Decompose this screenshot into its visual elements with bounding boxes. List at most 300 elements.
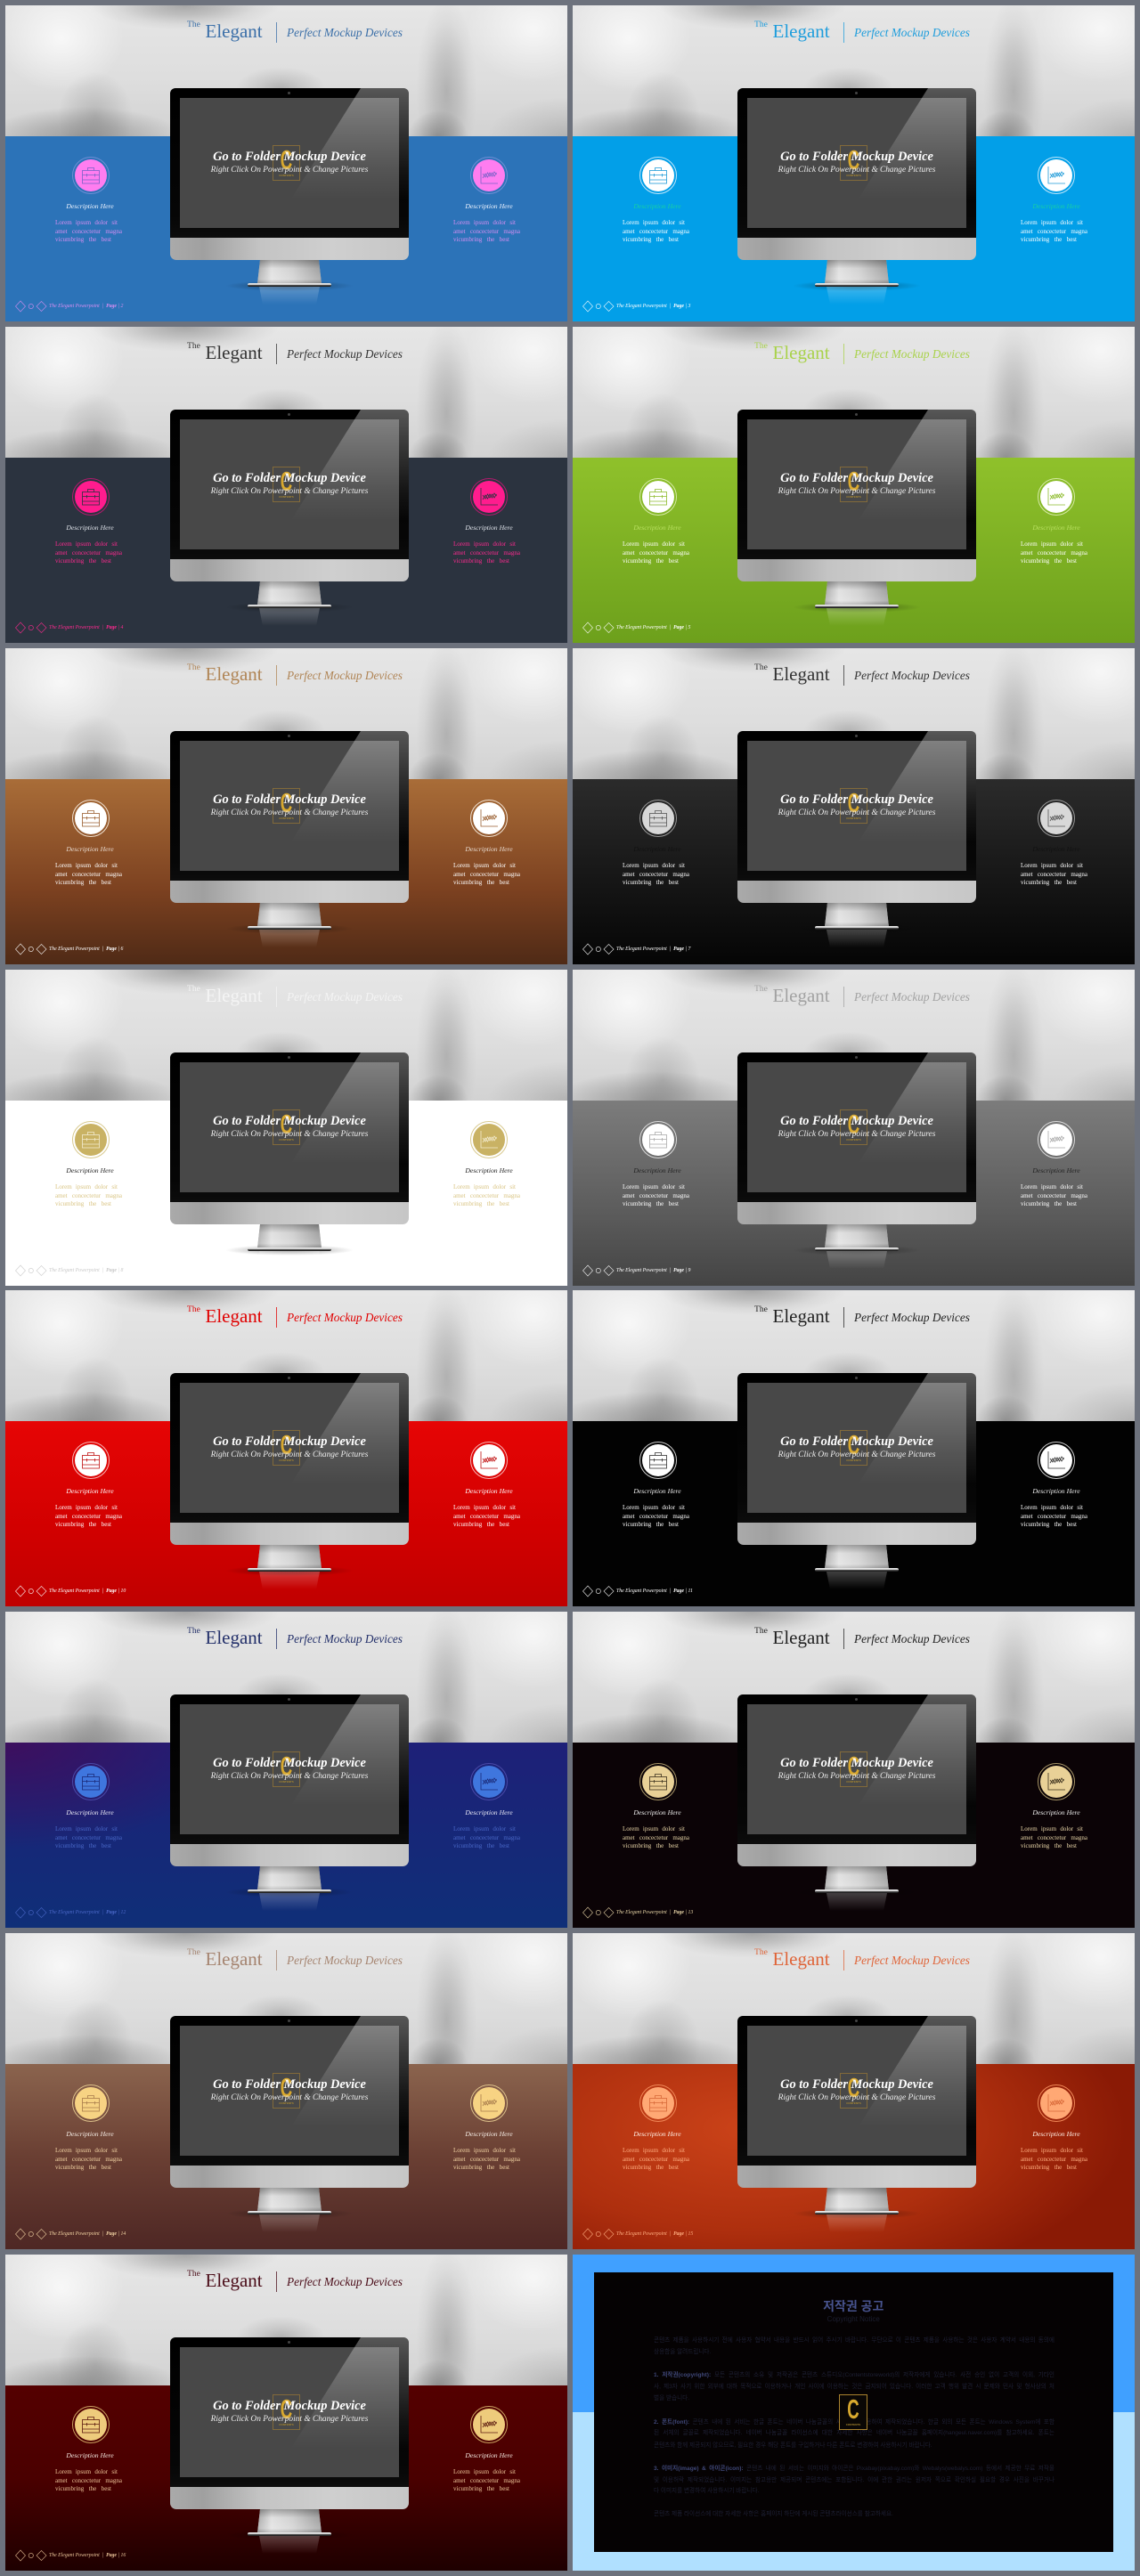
monitor mockup: CONTENTS (279, 2423, 294, 2426)
left description text: Lorem ipsum dolor sit (623, 1825, 685, 1832)
title: Perfect Mockup Devices (854, 347, 970, 361)
monitor mockup: Right Click On Powerpoint & Change Pictures (778, 166, 935, 175)
background: blurred grey wall (5, 1612, 567, 1743)
right description text: vicumbring the best (1021, 557, 1077, 565)
title: The (754, 1304, 768, 1314)
footer text: The Elegant Powerpoint | Page | 14 (49, 2231, 126, 2237)
right description heading: Description Here (465, 1487, 513, 1495)
lower colour panel (5, 2064, 567, 2249)
left description text: amet concectetur magna (623, 549, 689, 557)
right description text: amet concectetur magna (453, 2156, 520, 2163)
title: Elegant (205, 1305, 263, 1327)
monitor mockup: C (281, 2073, 292, 2103)
footer text: The Elegant Powerpoint | Page | 4 (49, 625, 123, 630)
monitor mockup: Right Click On Powerpoint & Change Pictures (778, 2093, 935, 2102)
title: Perfect Mockup Devices (287, 990, 403, 1004)
title: Elegant (773, 985, 830, 1006)
left description text: Lorem ipsum dolor sit (55, 1825, 118, 1832)
left description text (623, 1504, 694, 1532)
left description heading: Description Here (66, 2130, 114, 2138)
left description text: Lorem ipsum dolor sit (55, 540, 118, 548)
clause 1 line 1: 1. 저작권(copyright): 모든 콘텐츠의 소유 및 저작권은 콘텐츠 스튜디오(Contentstoreworld)의 저작자에게 있습니다. 사전 승인 없이 고객의 이외, 기타인 (654, 2372, 1054, 2378)
footer text: The Elegant Powerpoint | Page | 3 (616, 304, 690, 309)
title: The (187, 1304, 200, 1314)
right description heading: Description Here (465, 845, 513, 853)
footer icons (582, 2228, 615, 2240)
right description text: vicumbring the best (453, 1200, 509, 1207)
gold logo (839, 2394, 867, 2430)
title: Perfect Mockup Devices (287, 2275, 403, 2288)
background: blurred grey wall (573, 1290, 1135, 1422)
title: The (754, 662, 768, 672)
title: Perfect Mockup Devices (287, 1632, 403, 1646)
title: Perfect Mockup Devices (854, 1632, 970, 1646)
right description text: vicumbring the best (1021, 2164, 1077, 2171)
background: blurred grey wall (573, 1612, 1135, 1743)
right description text: Lorem ipsum dolor sit (453, 862, 516, 869)
right description text (453, 1825, 525, 1854)
right description heading: Description Here (465, 1166, 513, 1174)
footer icons (582, 1264, 615, 1277)
left description text: vicumbring the best (55, 1842, 111, 1849)
background: blurred grey wall (5, 970, 567, 1101)
title (751, 1624, 982, 1653)
left description text: amet concectetur magna (623, 228, 689, 235)
closing line: 콘텐츠 제품 라이선스에 대한 자세한 사항은 홈페이지 하단에 게시된 콘텐츠라이선스를 참고하세요. (654, 2511, 893, 2517)
intro line 1: 콘텐츠 제품을 사용하시기 전에 사용자 협약서 내용을 반드시 읽어 주시기 바랍니다. 무단으로 이 콘텐츠 제품을 사용하는 것은 사용자 계약서 내용의 동의에 (654, 2337, 1054, 2344)
clause 2 line 1: 2. 폰트(font): 콘텐츠 내에 된 서비는 한글 폰트는 네이버 나눔글꼴의 서비스를 이용하여 제작되었습니다. 한글 외의 모든 폰트는 Windows System에 포함 (654, 2419, 1054, 2426)
left description text: Lorem ipsum dolor sit (623, 540, 685, 548)
monitor mockup: Go to Folder Mockup Device (780, 1434, 933, 1449)
footer icons (582, 622, 615, 634)
right description text (453, 862, 520, 886)
left description heading: Description Here (66, 2451, 114, 2459)
footer icons (582, 1906, 615, 1919)
right description text (453, 1183, 520, 1207)
lower colour panel (5, 2385, 567, 2571)
right description text: Lorem ipsum dolor sit (1021, 1183, 1083, 1190)
left description heading: Description Here (633, 524, 681, 532)
footer icons (582, 1585, 615, 1597)
slide: grey, page 9 (573, 970, 1135, 1286)
footer text: The Elegant Powerpoint | Page | 15 (616, 2231, 693, 2237)
monitor mockup: Go to Folder Mockup Device (213, 2077, 366, 2092)
right description text: vicumbring the best (453, 1521, 509, 1528)
slide: black, page 11 (573, 1290, 1135, 1606)
monitor mockup: C (281, 788, 292, 818)
slide: sky blue, page 3 (573, 5, 1135, 321)
title: The (754, 1947, 768, 1957)
footer icons (15, 1264, 46, 1277)
left description heading: Description Here (633, 845, 681, 853)
right description text: amet concectetur magna (1021, 2156, 1087, 2163)
background: blurred grey wall (573, 5, 1135, 137)
title (187, 341, 403, 364)
slide: indigo night, page 12 (5, 1612, 567, 1928)
title: The (187, 662, 200, 672)
footer text: The Elegant Powerpoint | Page | 6 (49, 947, 123, 952)
title: Perfect Mockup Devices (854, 990, 970, 1004)
monitor mockup: Right Click On Powerpoint & Change Pictures (211, 487, 368, 496)
right description text: vicumbring the best (1021, 1200, 1077, 1207)
footer icons (15, 301, 46, 312)
gold logo: CONTENTS (846, 2423, 860, 2426)
right description text: vicumbring the best (453, 879, 509, 886)
left description text: amet concectetur magna (623, 1192, 689, 1199)
monitor mockup (170, 410, 409, 623)
left description text: vicumbring the best (55, 236, 111, 243)
title: Perfect Mockup Devices (854, 669, 970, 682)
clause 1 line 2: 사, 제3자 사기 위한 외부에 대하 목적으로 이용하거나 개인 사이에 이용하는 것은 금지되어 있습니다. 이러한 고객 행위 발견 시 문제와 민사 및 형사상의 처 (654, 2384, 1054, 2390)
title: Perfect Mockup Devices (287, 1954, 403, 1967)
footer icons (15, 2228, 47, 2240)
right description text: vicumbring the best (453, 557, 509, 565)
lower colour panel (573, 779, 1135, 964)
footer icons (15, 944, 46, 955)
monitor mockup: Right Click On Powerpoint & Change Pictures (211, 1451, 368, 1459)
footer text: The Elegant Powerpoint | Page | 11 (616, 1589, 693, 1594)
right description text: amet concectetur magna (1021, 871, 1087, 878)
monitor mockup: Go to Folder Mockup Device (780, 471, 933, 485)
monitor mockup: CONTENTS (846, 817, 861, 820)
background: blurred grey wall (5, 1933, 567, 2065)
slide: charcoal, page 7 (573, 648, 1135, 964)
footer text: The Elegant Powerpoint | Page | 7 (616, 947, 690, 952)
left description text (623, 540, 689, 565)
title (751, 1303, 982, 1331)
slide: near-black and tan, page 13 (573, 1612, 1135, 1928)
left description text: amet concectetur magna (623, 1834, 689, 1841)
clause 2 line 2: 된 서체의 글꼴로 제작되었습니다. 네이버 나눔글꼴 라이선스에 대한 자세한 사항은 네이버 나눔글꼴 홈페이지(hangeul.naver.com)를 참고하세요. 폰트는 (654, 2430, 1054, 2436)
title: Elegant (205, 342, 263, 363)
left description heading: Description Here (633, 2130, 681, 2138)
lower colour panel (5, 1421, 567, 1606)
icon: briefcase (639, 478, 677, 516)
left description heading: Description Here (633, 1166, 681, 1174)
monitor mockup (170, 731, 409, 945)
right description text: Lorem ipsum dolor sit (1021, 540, 1083, 548)
left description text: vicumbring the best (623, 557, 679, 565)
left description text: vicumbring the best (623, 2164, 679, 2171)
icon: briefcase (639, 1442, 677, 1479)
icon: chart (470, 1121, 508, 1158)
slide: copper brown, page 6 (5, 648, 567, 964)
title: Perfect Mockup Devices (287, 347, 403, 361)
right description heading: Description Here (1032, 524, 1080, 532)
left description text: amet concectetur magna (623, 871, 689, 878)
monitor mockup: CONTENTS (846, 495, 861, 499)
left description text (623, 862, 689, 886)
clause 3 line 3: 다 이미지를 변경하여 사용하시기 바랍니다. (654, 2488, 759, 2494)
left description text: Lorem ipsum dolor sit (55, 862, 118, 869)
monitor mockup: C (281, 145, 292, 175)
right description text: Lorem ipsum dolor sit (1021, 1504, 1083, 1511)
right description text: Lorem ipsum dolor sit (453, 1183, 516, 1190)
background: blurred grey wall (5, 1290, 567, 1422)
monitor mockup: Right Click On Powerpoint & Change Pictures (211, 2415, 368, 2424)
monitor mockup: Right Click On Powerpoint & Change Pictures (211, 1130, 368, 1139)
monitor mockup: Go to Folder Mockup Device (213, 1756, 366, 1770)
monitor mockup (737, 2016, 976, 2230)
title: The (754, 20, 768, 29)
right description text: vicumbring the best (1021, 1842, 1077, 1849)
title: Perfect Mockup Devices (287, 26, 403, 39)
lower colour panel (5, 779, 567, 964)
icon: chart (1038, 478, 1075, 516)
left description text: Lorem ipsum dolor sit (55, 2147, 118, 2154)
left description text: vicumbring the best (55, 2164, 111, 2171)
slide: copyright notice (573, 2255, 1135, 2571)
monitor mockup: Right Click On Powerpoint & Change Pictures (211, 166, 368, 175)
title (754, 662, 970, 686)
left description text: Lorem ipsum dolor sit (623, 1504, 685, 1511)
left description text: amet concectetur magna (55, 1192, 122, 1199)
monitor mockup: Go to Folder Mockup Device (213, 1114, 366, 1128)
left description text: vicumbring the best (623, 236, 679, 243)
monitor mockup: Right Click On Powerpoint & Change Pictures (778, 487, 935, 496)
monitor mockup (170, 88, 409, 301)
left description text (623, 1825, 694, 1854)
left description text: vicumbring the best (623, 1200, 679, 1207)
left description text (55, 2147, 126, 2175)
right description heading: Description Here (1032, 845, 1080, 853)
title: Elegant (773, 663, 830, 685)
right description text (453, 540, 520, 565)
right description text: vicumbring the best (453, 2164, 509, 2171)
left description text: amet concectetur magna (623, 2156, 689, 2163)
monitor mockup: Go to Folder Mockup Device (780, 792, 933, 807)
right description heading: Description Here (465, 202, 513, 210)
right description text: Lorem ipsum dolor sit (453, 2468, 516, 2475)
monitor mockup: Right Click On Powerpoint & Change Pictures (211, 809, 368, 817)
icon: chart (1038, 157, 1075, 194)
right description heading: Description Here (1032, 1166, 1080, 1174)
right description heading: Description Here (1032, 1808, 1080, 1816)
title (754, 20, 970, 43)
monitor mockup: C (281, 2394, 292, 2425)
right description text (1021, 219, 1087, 243)
notice subtitle: Copyright Notice (827, 2315, 880, 2323)
monitor mockup: CONTENTS (279, 1780, 294, 1784)
title (751, 1946, 982, 1974)
left description heading: Description Here (66, 1166, 114, 1174)
right description text (1021, 2147, 1092, 2175)
left description text (55, 1183, 122, 1207)
footer text: The Elegant Powerpoint | Page | 12 (49, 1910, 126, 1915)
monitor mockup: C (281, 1109, 292, 1140)
right description text: vicumbring the best (453, 2485, 509, 2492)
monitor mockup: Go to Folder Mockup Device (213, 1434, 366, 1449)
left description text: vicumbring the best (623, 1521, 679, 1528)
left description text: amet concectetur magna (623, 1513, 689, 1520)
monitor mockup: C (281, 1430, 292, 1460)
monitor mockup: CONTENTS (279, 1459, 294, 1462)
right description heading: Description Here (465, 2451, 513, 2459)
left description text (623, 2147, 694, 2175)
icon: chart (1038, 2084, 1075, 2122)
monitor mockup: CONTENTS (279, 817, 294, 820)
monitor mockup: Right Click On Powerpoint & Change Pictures (211, 2093, 368, 2102)
lower colour panel (5, 136, 567, 321)
right description text: vicumbring the best (1021, 236, 1077, 243)
title (183, 1624, 415, 1653)
lower colour panel (573, 1421, 1135, 1606)
lower colour panel (5, 458, 567, 643)
right description text: amet concectetur magna (453, 1834, 520, 1841)
background: blurred grey wall (5, 5, 567, 137)
monitor mockup: C (281, 467, 292, 497)
slide: green, page 5 (573, 327, 1135, 643)
title (187, 662, 403, 686)
icon: briefcase (639, 157, 677, 194)
monitor mockup: Go to Folder Mockup Device (780, 2077, 933, 2092)
right description text (1021, 1504, 1092, 1532)
icon: briefcase (72, 478, 110, 516)
clause 3 line 1: 3. 이미지(image) & 아이콘(icon): 콘텐츠 내에 된 서비는 이미지와 아이콘은 Pixabay(pixabay.com)와 Webalys(webalys.com) 등에서 제공한 무료 저작물 (654, 2466, 1054, 2472)
right description text: amet concectetur magna (453, 2477, 520, 2484)
monitor mockup: Right Click On Powerpoint & Change Pictures (778, 1772, 935, 1781)
right description text: amet concectetur magna (453, 871, 520, 878)
monitor mockup (170, 1694, 409, 1908)
left description text (55, 540, 122, 565)
left description heading: Description Here (633, 1808, 681, 1816)
right description text: vicumbring the best (1021, 1521, 1077, 1528)
background: blurred grey wall (573, 1933, 1135, 2065)
lower colour panel (5, 1743, 567, 1928)
left description text: vicumbring the best (623, 879, 679, 886)
icon: chart (470, 1442, 508, 1479)
left description text: Lorem ipsum dolor sit (623, 862, 685, 869)
title: Elegant (205, 1948, 263, 1970)
left description text: Lorem ipsum dolor sit (55, 219, 118, 226)
monitor mockup: Go to Folder Mockup Device (213, 471, 366, 485)
left description text: amet concectetur magna (55, 228, 122, 235)
lower colour panel (573, 458, 1135, 643)
right description text (1021, 862, 1087, 886)
title: Perfect Mockup Devices (854, 1954, 970, 1967)
monitor mockup: C (848, 1751, 859, 1782)
left description heading: Description Here (66, 524, 114, 532)
left description text: vicumbring the best (55, 557, 111, 565)
slide: maroon, page 16 (5, 2255, 567, 2571)
title: Elegant (205, 985, 263, 1006)
monitor mockup (170, 1373, 409, 1587)
slide: burnt orange, page 15 (573, 1933, 1135, 2249)
left description text: amet concectetur magna (55, 2156, 122, 2163)
right description text (1021, 1183, 1087, 1207)
monitor mockup: CONTENTS (846, 1138, 861, 1142)
left description heading: Description Here (66, 1808, 114, 1816)
right description heading: Description Here (1032, 1487, 1080, 1495)
title: Perfect Mockup Devices (854, 1311, 970, 1324)
left description text: amet concectetur magna (55, 2477, 122, 2484)
monitor mockup: C (848, 788, 859, 818)
left description heading: Description Here (66, 1487, 114, 1495)
title: The (187, 1626, 200, 1636)
right description text: amet concectetur magna (1021, 1834, 1087, 1841)
background: blurred grey wall (5, 2255, 567, 2386)
right description text: vicumbring the best (1021, 879, 1077, 886)
right description text (453, 219, 520, 243)
title: The (187, 1947, 200, 1957)
right description text: Lorem ipsum dolor sit (453, 1504, 516, 1511)
title: Perfect Mockup Devices (854, 26, 970, 39)
background: blurred grey wall (573, 648, 1135, 780)
title: Elegant (773, 1305, 830, 1327)
monitor mockup: C (281, 1751, 292, 1782)
monitor mockup: Right Click On Powerpoint & Change Pictures (778, 1130, 935, 1139)
right description text: Lorem ipsum dolor sit (453, 2147, 516, 2154)
right description text: Lorem ipsum dolor sit (453, 540, 516, 548)
footer icons (15, 1906, 47, 1919)
monitor mockup: C (848, 1109, 859, 1140)
right description text: amet concectetur magna (1021, 549, 1087, 557)
icon: chart (1038, 1121, 1075, 1158)
left description text: vicumbring the best (55, 2485, 111, 2492)
footer icons (15, 1585, 47, 1597)
background: blurred grey wall (573, 327, 1135, 459)
title: Elegant (205, 20, 263, 42)
icon: briefcase (72, 1763, 110, 1800)
title: The (187, 2269, 200, 2279)
title: The (187, 984, 200, 994)
background: blurred grey wall (5, 648, 567, 780)
footer text: The Elegant Powerpoint | Page | 5 (616, 625, 690, 630)
right description text: vicumbring the best (453, 236, 509, 243)
footer text: The Elegant Powerpoint | Page | 13 (616, 1910, 693, 1915)
left description text: amet concectetur magna (55, 1834, 122, 1841)
right description text: vicumbring the best (453, 1842, 509, 1849)
right description text: amet concectetur magna (1021, 1192, 1087, 1199)
icon: briefcase (639, 1763, 677, 1800)
left description text: Lorem ipsum dolor sit (623, 1183, 685, 1190)
slide: cocoa brown, page 14 (5, 1933, 567, 2249)
monitor mockup: C (848, 467, 859, 497)
footer text: The Elegant Powerpoint | Page | 9 (616, 1268, 690, 1273)
left description text: vicumbring the best (55, 1200, 111, 1207)
monitor mockup (737, 1373, 976, 1587)
icon: briefcase (72, 1442, 110, 1479)
title: The (754, 984, 768, 994)
title: Elegant (205, 1627, 263, 1648)
footer icons (15, 2549, 47, 2562)
title (187, 20, 403, 43)
lower colour panel (573, 2064, 1135, 2249)
left description heading: Description Here (633, 1487, 681, 1495)
left description text: vicumbring the best (55, 879, 111, 886)
footer text: The Elegant Powerpoint | Page | 8 (49, 1268, 123, 1273)
icon: chart (470, 1763, 508, 1800)
right description text: amet concectetur magna (1021, 228, 1087, 235)
right description text: Lorem ipsum dolor sit (1021, 2147, 1083, 2154)
icon: chart (470, 2406, 508, 2443)
monitor mockup: CONTENTS (846, 2101, 861, 2105)
icon: briefcase (639, 1121, 677, 1158)
right description text (453, 2147, 525, 2175)
right description heading: Description Here (1032, 2130, 1080, 2138)
monitor mockup: CONTENTS (846, 1459, 861, 1462)
right description text: amet concectetur magna (453, 1192, 520, 1199)
slide: slate, page 4 (5, 327, 567, 643)
lower colour panel (573, 136, 1135, 321)
right description text (1021, 1825, 1092, 1854)
right description heading: Description Here (1032, 202, 1080, 210)
left description heading: Description Here (633, 202, 681, 210)
left description text (55, 862, 122, 886)
monitor mockup: Go to Folder Mockup Device (780, 1114, 933, 1128)
right description text: amet concectetur magna (1021, 1513, 1087, 1520)
lower colour panel (573, 1101, 1135, 1286)
